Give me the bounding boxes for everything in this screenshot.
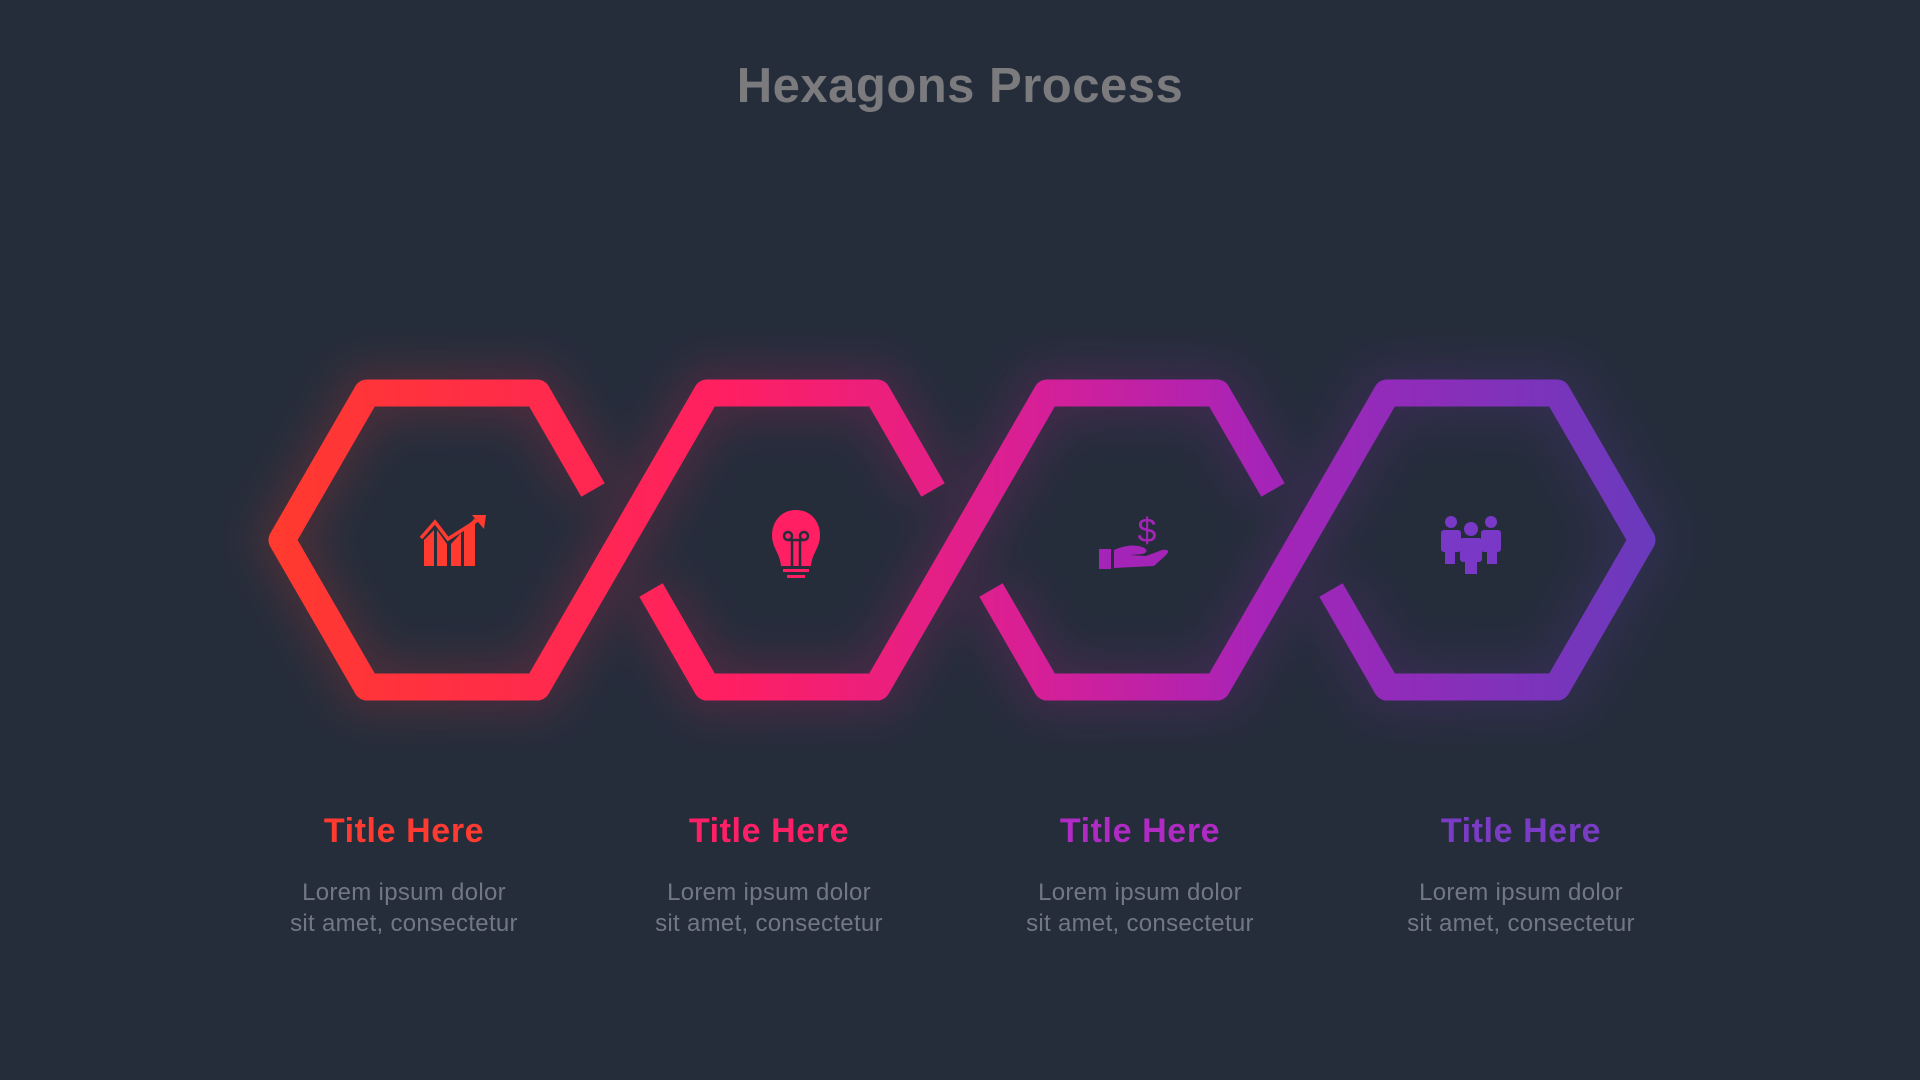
glow xyxy=(282,393,1642,687)
icon: hand with dollar xyxy=(1099,512,1168,569)
item 3: Lorem ipsum dolor xyxy=(1038,879,1242,906)
item 4: Lorem ipsum dolor xyxy=(1419,879,1623,906)
item 2: Lorem ipsum dolor xyxy=(667,879,871,906)
item 2: sit amet, consectetur xyxy=(655,910,883,937)
icon: people xyxy=(1441,516,1501,574)
item 1: Lorem ipsum dolor xyxy=(302,879,506,906)
hexagon strokes xyxy=(282,393,1642,687)
item 3 xyxy=(1026,812,1254,937)
item 1 xyxy=(290,812,518,937)
title: Hexagons Process xyxy=(737,59,1183,113)
item 4 xyxy=(1407,812,1635,937)
icon: hand with dollar: $ xyxy=(1138,512,1157,550)
item 3: Title Here xyxy=(1060,812,1220,850)
icon: light bulb xyxy=(772,510,820,578)
item 2: Title Here xyxy=(689,812,849,850)
item 2 xyxy=(655,812,883,937)
item 3: sit amet, consectetur xyxy=(1026,910,1254,937)
item 4: Title Here xyxy=(1441,812,1601,850)
item 4: sit amet, consectetur xyxy=(1407,910,1635,937)
item 1: sit amet, consectetur xyxy=(290,910,518,937)
icon: growth chart xyxy=(421,515,486,566)
item 1: Title Here xyxy=(324,812,484,850)
